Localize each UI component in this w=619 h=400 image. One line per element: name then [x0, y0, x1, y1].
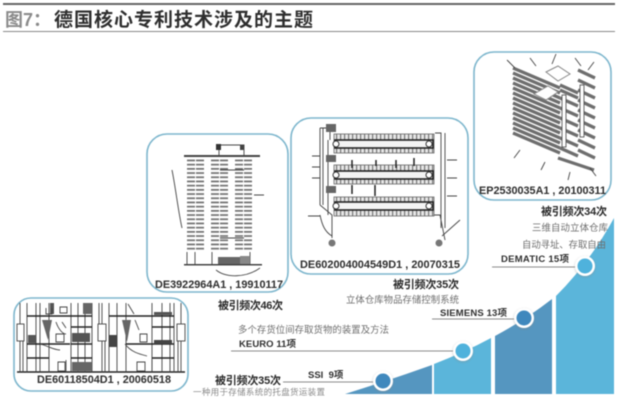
patent drawing: high-bay rack tower	[172, 144, 264, 276]
title	[3, 3, 615, 32]
panel: DE3922964A1	[147, 134, 288, 292]
milestone: SIEMENS 13 patents: SIEMENS 13项	[440, 308, 507, 319]
description: DEMATIC line 1: 三维自动立体仓库	[532, 222, 608, 233]
milestone: SIEMENS 13 patents	[432, 308, 534, 329]
annotation: citations 34: 被引频次34次	[541, 204, 607, 218]
description: KEURO: 多个存货位间存取货物的装置及方法	[238, 324, 389, 335]
patent drawing: three conveyor levels	[308, 124, 460, 246]
description: SIEMENS: 立体仓库物品存储控制系统	[346, 294, 459, 305]
patent label: EP2530035A1 , 20100311	[479, 185, 606, 197]
milestone: KEURO 11 patents	[231, 339, 473, 362]
description: SSI: 一种用于存储系统的托盘货运装置	[193, 387, 325, 397]
milestone: DEMATIC 15 patents: DEMATIC 15项	[501, 254, 569, 265]
milestone: SSI 9 patents: SSI 9项	[308, 370, 344, 381]
panel: DE602004004549D1	[291, 118, 468, 274]
growth area chart	[345, 218, 614, 394]
annotation: citations 46: 被引频次46次	[218, 298, 283, 312]
patent drawing: picking rack	[17, 303, 185, 372]
patent label: DE3922964A1 , 19910117	[155, 279, 283, 291]
milestone: KEURO 11 patents: KEURO 11项	[239, 339, 296, 350]
panel: DE60118504D1	[14, 298, 188, 391]
panel: EP2530035A1	[474, 52, 611, 200]
milestone: DEMATIC 15 patents	[492, 254, 595, 277]
annotation: citations 35 (lower): 被引频次35次	[215, 373, 281, 387]
title: 图7：	[5, 10, 51, 30]
milestone: SSI 9 patents	[283, 370, 393, 392]
title: 德国核心专利技术涉及的主题	[54, 8, 313, 31]
description: DEMATIC line 2: 自动寻址、存取自由	[522, 239, 606, 250]
patent label: DE602004004549D1 , 20070315	[300, 259, 460, 271]
patent label: DE60118504D1 , 20060518	[37, 374, 171, 386]
patent drawing: 3D automated warehouse	[507, 54, 596, 180]
annotation: citations 35 (middle): 被引频次35次	[393, 277, 459, 291]
